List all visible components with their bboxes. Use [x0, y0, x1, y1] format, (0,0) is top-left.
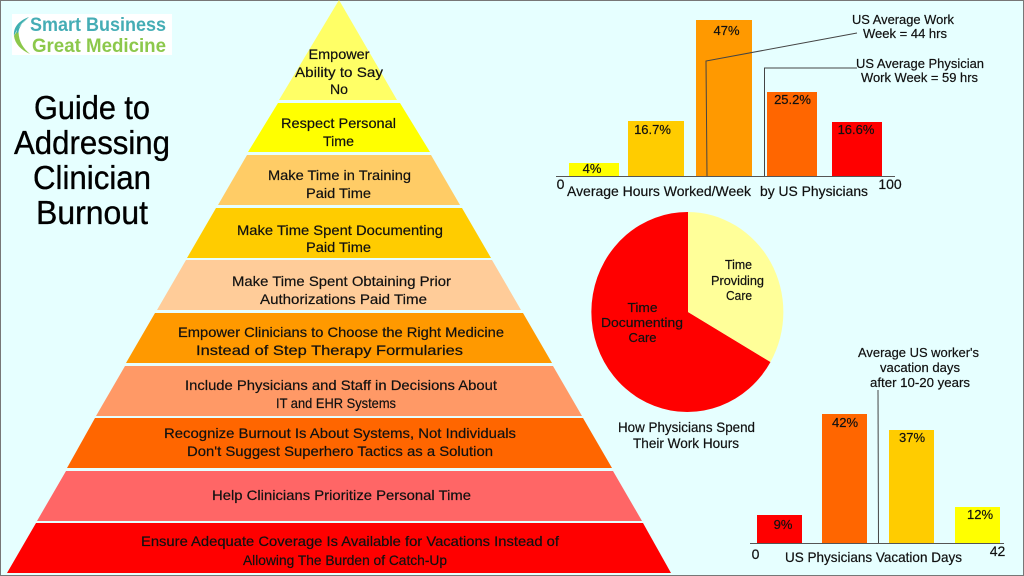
pyramid tier 5: Authorizations Paid Time [260, 291, 427, 307]
label: time providing care: Time [725, 257, 752, 272]
axis labels [752, 543, 1005, 562]
pie caption: How Physicians Spend [618, 419, 755, 435]
axis labels: 100 [878, 176, 902, 192]
pyramid tier 1 [279, 0, 397, 100]
pyramid tier 8 [67, 418, 612, 468]
label: time providing care: Providing [711, 273, 764, 288]
callout: US average physician work week [856, 56, 984, 85]
axis labels: 0 [752, 546, 760, 562]
axis labels: 0 [557, 176, 565, 192]
bar values [583, 23, 875, 176]
label: time documenting care [601, 300, 683, 345]
pie caption: Their Work Hours [633, 435, 739, 451]
bar values: 16.7% [634, 122, 671, 137]
callout: average US worker's vacation days: Average US worker's [858, 345, 979, 360]
bars [569, 20, 882, 177]
pyramid tier 8: Recognize Burnout Is About Systems, Not Individuals [164, 425, 516, 441]
label: time documenting care: Documenting [601, 315, 683, 330]
bar values: 4% [583, 161, 602, 176]
label: time documenting care: Care [628, 330, 656, 345]
axis labels: 42 [990, 543, 1005, 559]
callout: average US worker's vacation days [858, 345, 979, 390]
pyramid tier 4 [187, 208, 491, 258]
slice: time documenting care [591, 212, 770, 412]
callout: US average work week [852, 12, 954, 41]
title: Addressing [14, 124, 170, 161]
pyramid tier 9: Help Clinicians Prioritize Personal Time [212, 487, 471, 503]
pyramid tier 1: Ability to Say [295, 64, 383, 80]
bar values [774, 415, 993, 532]
pyramid tier 10 [7, 523, 671, 573]
pyramid tier 6: Empower Clinicians to Choose the Right Medicine [178, 324, 504, 340]
pyramid tier 2: Respect Personal [281, 115, 396, 131]
pyramid tier 4: Paid Time [306, 239, 371, 255]
bar chart: average hours worked per week [556, 12, 984, 199]
bar values: 47% [713, 23, 740, 38]
pyramid tier 10: Allowing The Burden of Catch-Up [243, 552, 447, 568]
chart title: by US Physicians [760, 183, 868, 199]
axis labels [557, 176, 902, 192]
callout: average US worker's vacation days: after 10-20 years [870, 375, 971, 390]
chart title: Average Hours Worked/Week [567, 183, 752, 199]
callout: US average physician work week: Work Week = 59 hrs [861, 70, 978, 85]
callout: US average physician work week: US Average Physician [856, 56, 984, 71]
leader line: average vacation [877, 390, 880, 543]
pyramid tier 5 [157, 260, 521, 310]
pyramid tier 5: Make Time Spent Obtaining Prior [232, 273, 451, 289]
pyramid [7, 0, 671, 573]
icon: logo crescent [14, 17, 30, 54]
chart title [567, 183, 868, 199]
label: time providing care [711, 257, 764, 303]
title: Burnout [36, 194, 148, 231]
leader line: 44 hrs [706, 33, 857, 176]
bar values: 42% [832, 415, 858, 430]
pyramid tier 6 [126, 313, 552, 363]
bar chart: US physicians vacation days [750, 345, 1005, 565]
callout: US average work week: US Average Work [852, 12, 954, 27]
pyramid tier 3 [218, 155, 460, 205]
pyramid tier 6: Instead of Step Therapy Formularies [196, 342, 463, 358]
pyramid tier 9 [37, 471, 642, 521]
logo [12, 14, 172, 57]
label: time documenting care: Time [628, 300, 658, 315]
bar values: 16.6% [838, 122, 875, 137]
bars [757, 414, 1000, 543]
chart title: US Physicians Vacation Days [785, 549, 962, 565]
title [14, 89, 170, 231]
pyramid tier 1: No [330, 81, 348, 97]
bar values: 12% [967, 507, 993, 522]
logo: Smart Business [30, 15, 166, 36]
pie chart: how physicians spend work hours [591, 212, 783, 451]
logo: Great Medicine [32, 36, 166, 57]
pyramid tier 2: Time [323, 133, 354, 149]
title: Clinician [33, 159, 151, 196]
leader line: 59 hrs [764, 68, 857, 176]
pyramid tier 4: Make Time Spent Documenting [237, 222, 443, 238]
label: time providing care: Care [726, 288, 752, 303]
slice: time providing care [688, 212, 783, 362]
pyramid tier 7: Include Physicians and Staff in Decisions About [185, 377, 497, 393]
pyramid tier 7 [96, 366, 582, 416]
pyramid tier 3: Make Time in Training [268, 167, 411, 183]
callout: average US worker's vacation days: vacation days [880, 360, 960, 375]
bar values: 25.2% [774, 92, 811, 107]
pyramid tier 10: Ensure Adequate Coverage Is Available for Vacations Instead of [141, 533, 559, 549]
title: Guide to [34, 89, 150, 126]
pie caption [618, 419, 755, 451]
pyramid tier 7: IT and EHR Systems [276, 395, 396, 411]
callout: US average work week: Week = 44 hrs [863, 26, 947, 41]
bar values: 37% [899, 430, 925, 445]
bar values: 9% [774, 517, 793, 532]
pyramid tier 2 [248, 103, 430, 152]
pyramid tier 8: Don't Suggest Superhero Tactics as a Solution [187, 443, 493, 459]
pyramid tier 1: Empower [308, 46, 370, 62]
pyramid tier 3: Paid Time [306, 185, 371, 201]
